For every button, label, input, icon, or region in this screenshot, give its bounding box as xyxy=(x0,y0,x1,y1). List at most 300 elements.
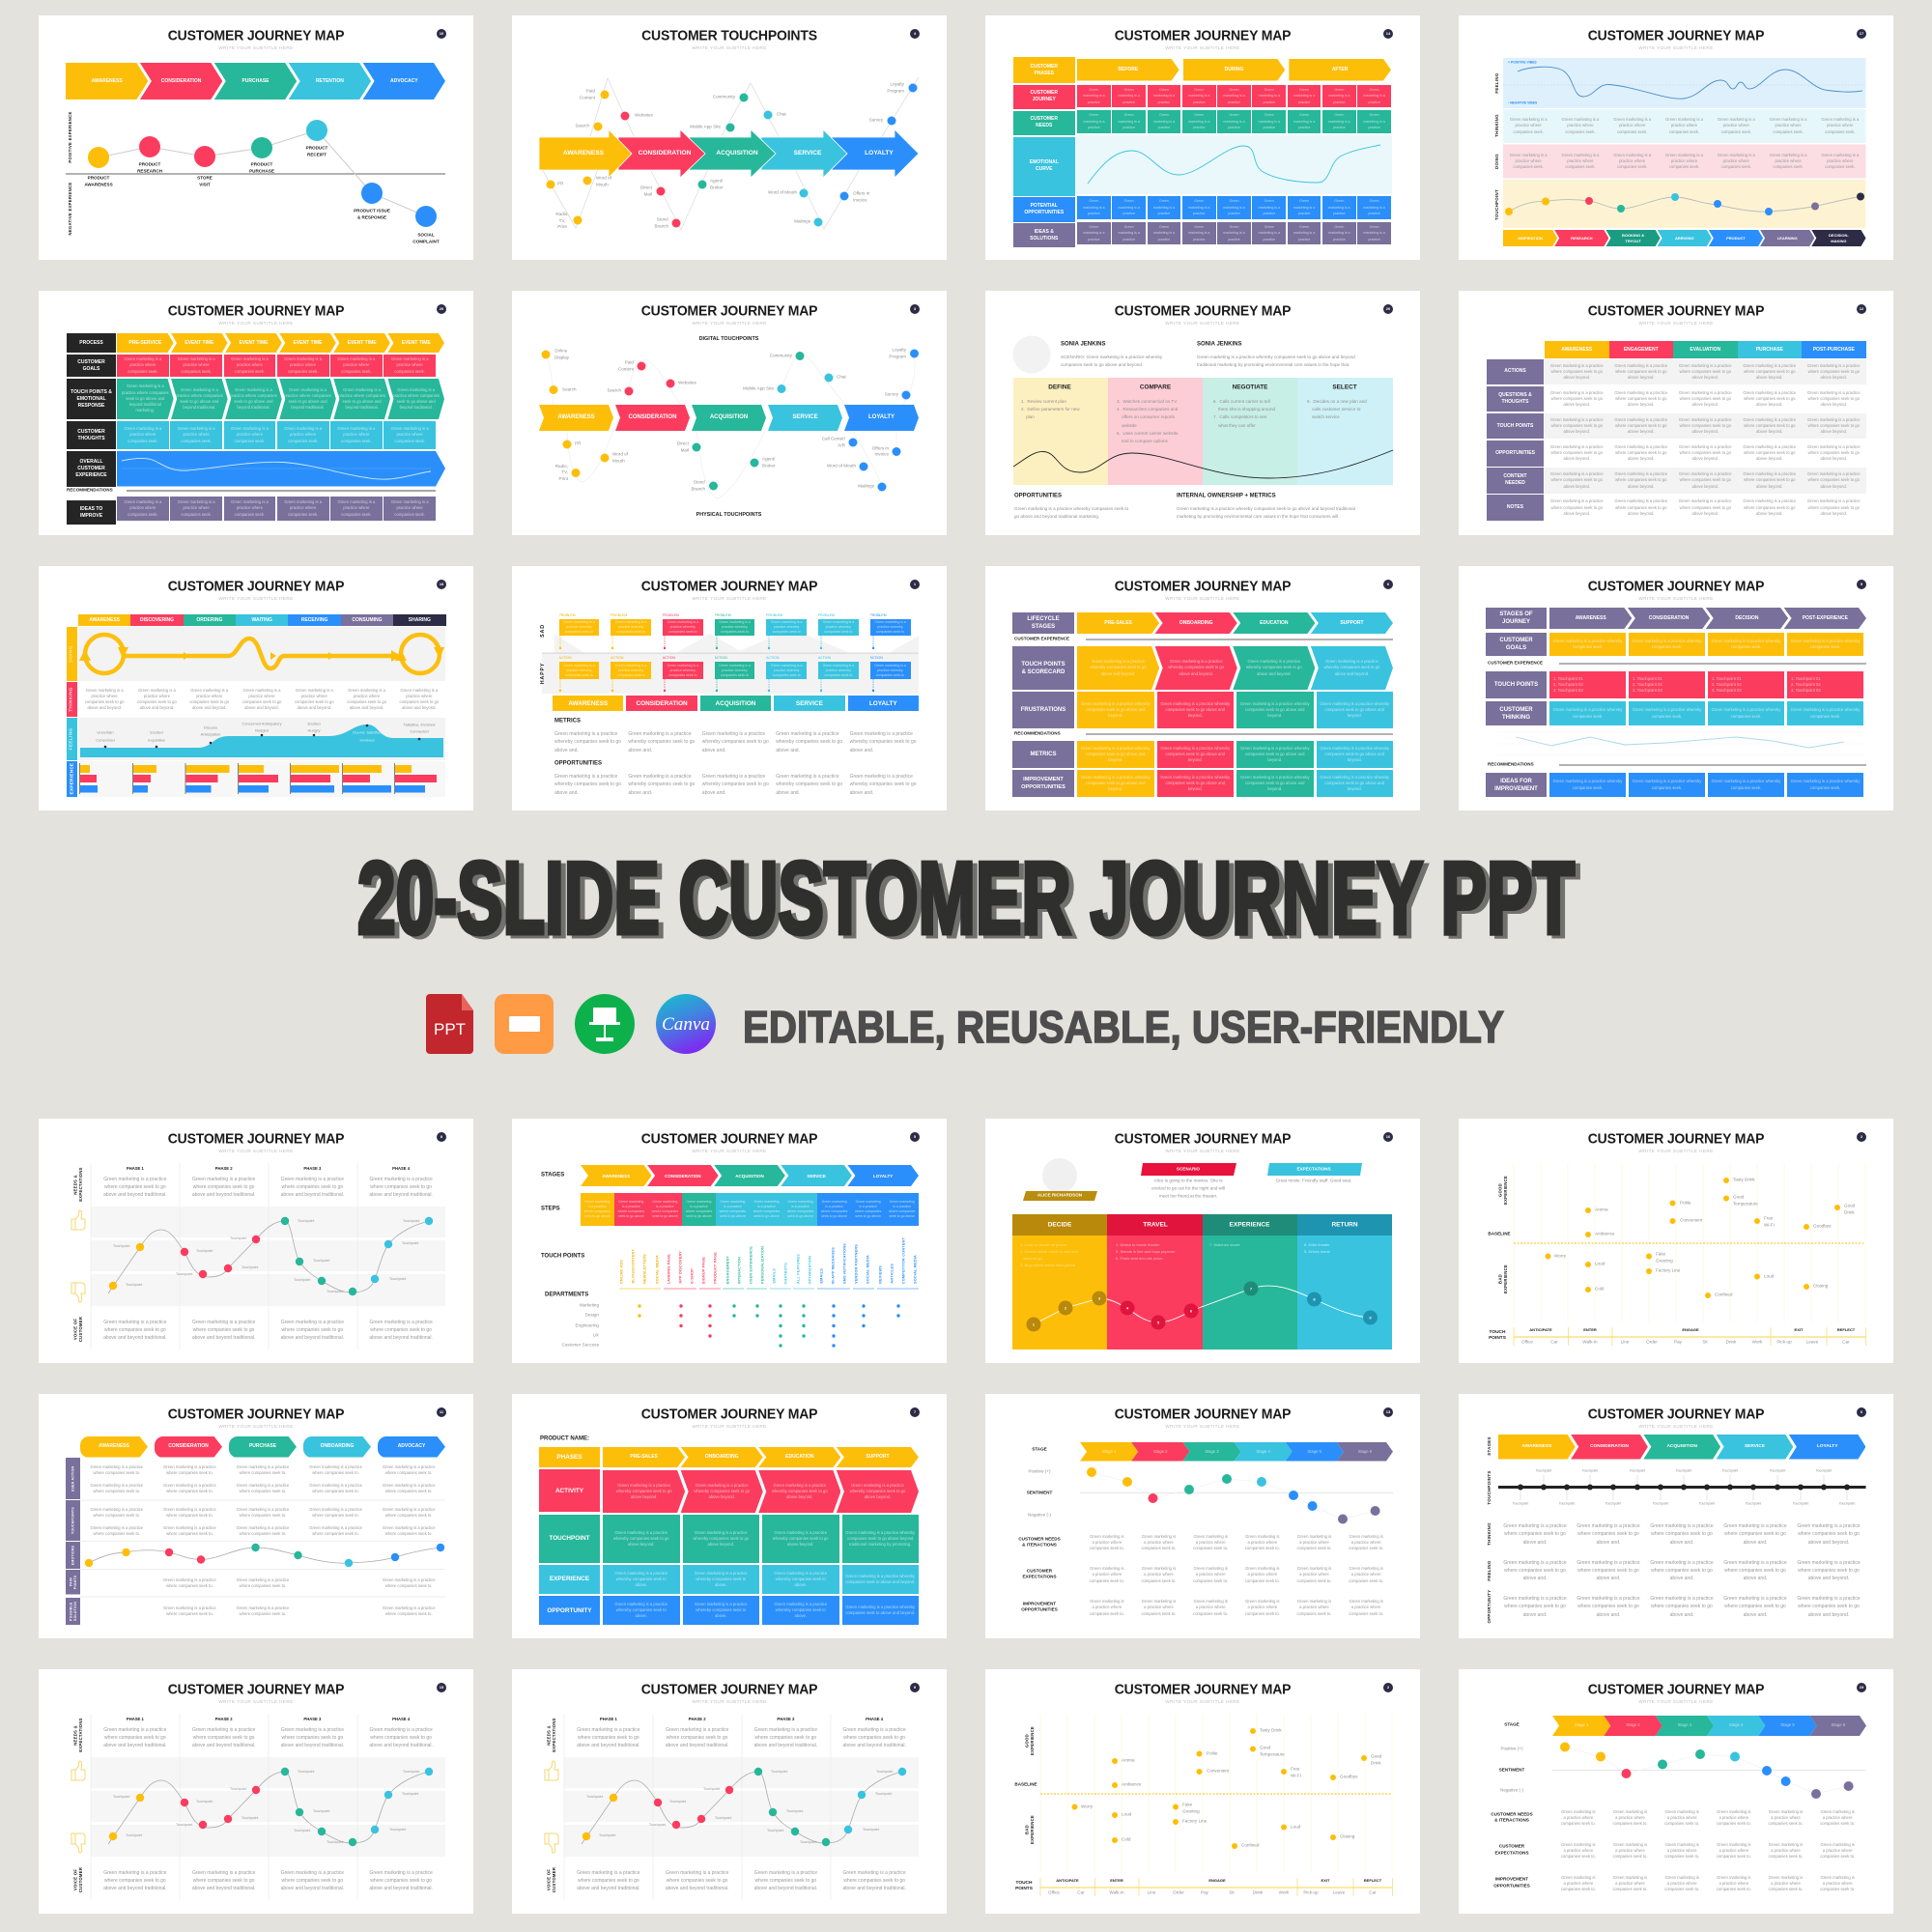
row label: EMOTIONS xyxy=(71,1546,74,1565)
stage chevrons: CONSIDERATION xyxy=(1590,1444,1629,1449)
touchpoint label: Search xyxy=(562,386,577,391)
panel: digital and physical touchpoints xyxy=(512,291,947,535)
row label xyxy=(1491,1811,1533,1824)
touchpoint dots xyxy=(541,350,919,498)
stage chevrons: TRYOUT xyxy=(1625,238,1641,243)
icon: google slides xyxy=(0,0,580,1063)
needs text: Green marketing is a practice where companies seek to. xyxy=(1090,1534,1124,1550)
table body: Green marketing is a practice where companies seek to go above beyond. xyxy=(1807,390,1861,407)
heading: CUSTOMER JOURNEY MAP xyxy=(1115,26,1291,43)
phase curve chart xyxy=(39,1119,473,1363)
stage pills: ONBOARDING xyxy=(321,1443,354,1449)
opportunity text: Green marketing is a practice where companies seek to go above and. xyxy=(1503,1596,1567,1618)
section label: CUSTOMER EXPERIENCE xyxy=(1014,637,1069,641)
stage chevrons: Stage 2 xyxy=(1153,1449,1167,1454)
customer journey cells xyxy=(1077,85,1391,107)
persona name: SONIA JENKINS xyxy=(1197,342,1241,348)
phase chevrons: ONBOARDING xyxy=(705,1454,739,1460)
thinking text: Green marketing is a practice where companies seek to go above and. xyxy=(1577,1523,1640,1546)
vertical touchpoint list: APP DISCOVERY xyxy=(678,1251,682,1284)
table body: Green marketing is a practice where companies seek to go above beyond. xyxy=(1743,390,1796,407)
touch point phases: Car xyxy=(1550,1340,1558,1345)
touchpoint labels: Touchpoint xyxy=(196,1800,213,1804)
sentiment chart xyxy=(1459,1669,1893,1914)
stage chevrons: Stage 5 xyxy=(1308,1449,1321,1454)
lower touchpoint labels: Touchpoint xyxy=(1793,1501,1808,1505)
arrow label: ACQUISITION xyxy=(716,150,758,156)
touch point phases: ENTER xyxy=(1110,1878,1123,1883)
vertical touchpoint list: COMPETITOR CONTENT xyxy=(901,1237,905,1284)
touchpoint labels: Touchpoint xyxy=(402,1241,418,1245)
improvement cells xyxy=(1077,770,1393,797)
touch point chevrons: Green marketing is a practice whereby companies seek to go above and beyond. xyxy=(1246,659,1302,676)
opportunity cells: Green marketing is a practice whereby companies seek to above and beyond. xyxy=(845,1605,915,1615)
user action text: Green marketing is a practice where companies seek to. xyxy=(237,1483,289,1493)
vertical touchpoint list: ALL FEATURES xyxy=(796,1254,800,1284)
problem labels: PROBLEM xyxy=(663,612,679,616)
decide list xyxy=(1020,1241,1078,1268)
needs text: Green marketing is a practice where companies seek to go above and beyond traditional. xyxy=(666,1727,728,1748)
feeling text: Green marketing is a practice where companies seek to go above and beyond. xyxy=(1797,1560,1861,1581)
row label xyxy=(69,1576,77,1589)
touchpoint label: Community xyxy=(770,353,792,357)
ideas cells: Green marketing is a practice where companies seek. xyxy=(178,499,215,517)
stage chevrons: AWARENESS xyxy=(557,414,595,420)
ideas cells: Green marketing is a practice xyxy=(1328,225,1350,242)
process chevrons xyxy=(117,333,444,353)
touchpoints text: Green marketing is a practice where companies seek to. xyxy=(163,1507,216,1518)
possible solution text: Green marketing is a practice where companies seek to. xyxy=(163,1605,216,1616)
needs text: Green marketing is a practice where companies seek to. xyxy=(1349,1534,1383,1550)
customer needs cells: Green marketing is a practice xyxy=(1188,113,1209,129)
negotiate list: what they can offer xyxy=(1218,423,1256,428)
vertical touchpoint list: SIGNUP PAGE xyxy=(701,1257,705,1284)
row label: CUSTOMER xyxy=(1027,1568,1052,1573)
voice text: Green marketing is a practice where companies seek to go above and beyond traditional. xyxy=(666,1870,728,1891)
user action text: Green marketing is a practice where companies seek to. xyxy=(309,1483,362,1493)
page badge xyxy=(437,1683,446,1692)
heading: CUSTOMER JOURNEY MAP xyxy=(1588,577,1764,594)
arrow label: CONSIDERATION xyxy=(639,150,691,156)
touch point phases: Car xyxy=(1369,1890,1377,1895)
table body: Green marketing is a practice where companies seek to go above beyond. xyxy=(1743,498,1796,516)
row label: TOUCHPOINT xyxy=(1494,189,1499,220)
thinking cells xyxy=(1510,117,1859,134)
needs text: Green marketing is a practice where companies seek to go above and beyond traditional. xyxy=(103,1727,167,1748)
compare list: tool to compare options xyxy=(1122,439,1168,443)
touchpoint label: Chat xyxy=(837,375,846,380)
heading: CUSTOMER JOURNEY MAP xyxy=(1115,577,1291,594)
touchpoint label: PR xyxy=(557,182,563,186)
customer thoughts cells: Green marketing is a practice where companies seek. xyxy=(337,426,375,443)
ideas cells: Green marketing is a practice whereby companies seek. xyxy=(1553,779,1622,790)
axis label positive: POSITIVE EXPERIENCE xyxy=(68,111,72,163)
page badge xyxy=(437,304,446,314)
touchpoint labels: Touchpoint xyxy=(767,1829,783,1833)
vertical touchpoint list: SOCIAL MEDIA xyxy=(655,1255,659,1284)
description text: traditional marketing by promoting environmental core values in the hope that. xyxy=(1197,362,1350,367)
feeling label: Inquisitive xyxy=(148,737,165,742)
touch point chevrons: Green marketing is a practice where companies seek to go above and beyond traditional. xyxy=(176,387,223,410)
opportunity text xyxy=(1498,1595,1865,1619)
touch points label: TOUCH xyxy=(1490,1330,1505,1335)
stage chevrons: AWARENESS xyxy=(1522,1444,1551,1449)
touch point phases: Walk-in xyxy=(1109,1890,1124,1895)
row label: STAGES xyxy=(1487,1436,1492,1456)
touchpoint label: Mailings xyxy=(794,219,810,224)
point labels: Drink xyxy=(1844,1209,1855,1214)
touchpoint label: Mobile App Site xyxy=(743,385,774,390)
stage chevrons xyxy=(1080,1442,1393,1461)
problem labels: PROBLEM xyxy=(611,612,627,616)
point labels: Closing xyxy=(1340,1834,1354,1839)
section label: RECOMMENDATIONS xyxy=(1488,762,1534,767)
doing cells: Green marketing is a practice where companies seek. xyxy=(1665,153,1703,169)
touch point phases: ENGAGE xyxy=(1208,1878,1226,1883)
compare list xyxy=(1117,398,1179,445)
customer journey cells: Green marketing is a practice xyxy=(1223,88,1245,104)
row label: STAGE xyxy=(1504,1722,1520,1727)
touchpoint label xyxy=(596,175,611,186)
row labels: ACTIONS xyxy=(1504,368,1526,374)
touchpoint labels: Touchpoint xyxy=(176,1823,192,1827)
touch point phases: Pay xyxy=(1674,1340,1682,1345)
table body: Green marketing is a practice where companies seek to go above beyond. xyxy=(1807,417,1861,434)
touchpoint arrows and dots xyxy=(539,77,920,230)
panel: stages of journey with line chart xyxy=(1459,566,1893,810)
axis label xyxy=(73,1718,83,1752)
define list xyxy=(1021,398,1080,422)
touchpoint label: Community xyxy=(713,95,735,99)
row labels: POTENTIAL xyxy=(1031,203,1058,209)
expectations text: Green marketing is a practice where companies seek to. xyxy=(1193,1566,1228,1583)
stage chevrons: CONSIDERATION xyxy=(161,77,201,83)
frustrations cells: Green marketing is a practice whereby companies seek to go above and beyond. xyxy=(1081,701,1151,718)
needs text: Green marketing is a practice where companies seek to go above and beyond traditional. xyxy=(577,1727,640,1748)
row label: POSSIBLE xyxy=(69,1602,72,1621)
vertical touchpoint list: ONLINE ADS xyxy=(619,1260,623,1284)
phase headers xyxy=(564,1717,919,1723)
sentiment line chart xyxy=(1459,566,1893,810)
needs text: Green marketing is a practice where companies seek to. xyxy=(1664,1809,1699,1826)
phase headers: PHASE 2 xyxy=(215,1717,233,1721)
point labels: Aroma xyxy=(1122,1758,1135,1763)
thinking cells: Green marketing is a practice where companies seek. xyxy=(1510,117,1548,134)
row labels: PHASES xyxy=(1034,70,1054,75)
stage chevrons: RETENTION xyxy=(316,77,344,83)
row label: CUSTOMER xyxy=(1499,638,1533,643)
needs text: Green marketing is a practice where companies seek to. xyxy=(1612,1809,1648,1826)
needs text: Green marketing is a practice where companies seek to go above and beyond traditional. xyxy=(192,1727,255,1748)
thinking text: Green marketing is a practice where companies seek to go above and beyond. xyxy=(137,688,177,710)
page badge: 9 xyxy=(914,1685,916,1690)
row labels: CUSTOMER xyxy=(77,359,105,365)
heading: CUSTOMER JOURNEY MAP xyxy=(168,1680,344,1697)
point labels: Greeting xyxy=(1182,1808,1200,1813)
stage chevrons: LOYALTY xyxy=(873,1173,893,1179)
touchpoint label: Websites xyxy=(635,113,653,118)
opportunities text: go above and beyond traditional marketing. xyxy=(1014,514,1099,519)
action cards: Green marketing is a practice whereby companies seek to xyxy=(771,663,802,676)
touchpoint labels: Touchpoint xyxy=(242,1265,258,1269)
user action text: Green marketing is a practice where companies seek to. xyxy=(383,1483,436,1493)
touchpoint label: Search xyxy=(575,124,589,128)
label: PRODUCT xyxy=(306,145,327,150)
touch point phases: Car xyxy=(1842,1340,1850,1345)
phase headers: PHASE 4 xyxy=(392,1717,410,1721)
heading: CUSTOMER JOURNEY MAP xyxy=(168,1405,344,1422)
point labels: Confined xyxy=(1241,1843,1259,1848)
stage bars: AWARENESS xyxy=(568,699,608,707)
customer journey cells: Green marketing is a practice xyxy=(1188,88,1209,104)
needs text: Green marketing is a practice where companies seek to go above and beyond traditional. xyxy=(281,1177,344,1198)
point labels: Fake xyxy=(1656,1251,1665,1256)
stage bars: LOYALTY xyxy=(869,699,897,707)
problem labels: PROBLEM xyxy=(818,612,835,616)
improvement cells: Green marketing is a practice whereby companies seek to go above and beyond. xyxy=(1160,775,1230,791)
voice text: Green marketing is a practice where companies seek to go above and beyond traditional. xyxy=(754,1870,817,1891)
row labels: CUSTOMER xyxy=(77,429,105,435)
table body: Green marketing is a practice where companies seek to go above beyond. xyxy=(1550,390,1604,407)
lower touchpoint labels xyxy=(1459,1394,1893,1638)
axis label: NEEDS & xyxy=(73,1175,77,1194)
row label: EXPECTATIONS xyxy=(1022,1575,1057,1578)
description text: Green marketing is a practice whereby companies seek to go above and beyond xyxy=(1197,355,1355,359)
label xyxy=(305,145,328,156)
underlines and department dots xyxy=(512,1119,947,1363)
scenario text: Alice is going to the movies. She is xyxy=(1154,1179,1222,1183)
action labels: ACTION xyxy=(818,656,831,660)
physical touchpoints label: PHYSICAL TOUCHPOINTS xyxy=(696,512,761,518)
experience cells: Green marketing is a practice whereby companies seek to above. xyxy=(614,1571,668,1587)
lower touchpoint labels: Touchpoint xyxy=(1653,1501,1668,1505)
lower touchpoint labels: Touchpoint xyxy=(1839,1501,1855,1505)
touchpoint labels: Touchpoint xyxy=(669,1800,686,1804)
opportunities text xyxy=(1014,505,1128,521)
axis label xyxy=(73,1317,83,1342)
panel: user action emotions rows xyxy=(39,1394,473,1638)
compare list: website xyxy=(1122,423,1137,428)
stage chevrons: Stage 6 xyxy=(1832,1722,1845,1727)
row label: LIFECYCLE STAGES xyxy=(1027,616,1060,630)
upper touchpoint labels xyxy=(1459,1394,1893,1638)
touchpoints text: Green marketing is a practice where companies seek to. xyxy=(383,1525,436,1536)
ideas cells: Green marketing is a practice xyxy=(1293,225,1315,242)
feeling label: Anticipation xyxy=(201,732,220,736)
heading: CUSTOMER JOURNEY MAP xyxy=(641,301,817,319)
touchpoint labels: Touchpoint xyxy=(230,1787,246,1791)
pain points text: Green marketing is a practice where companies seek to. xyxy=(237,1577,289,1588)
metrics heading: INTERNAL OWNERSHIP + METRICS xyxy=(1177,493,1276,498)
improvement text: Green marketing is a practice where companies seek to. xyxy=(1349,1599,1383,1616)
row label xyxy=(1021,1601,1058,1613)
vertical touchpoint list: IN-APP MESSAGES xyxy=(831,1247,835,1284)
touchpoint label: Offers in xyxy=(853,190,869,195)
touchpoint label: Invoice xyxy=(874,452,889,456)
touchpoint cells: Green marketing is a practice whereby companies seek to go above beyond. xyxy=(693,1530,749,1547)
page badge: 2 xyxy=(1861,1134,1862,1139)
heading: CUSTOMER JOURNEY MAP xyxy=(168,301,344,319)
customer journey cells: Green marketing is a practice xyxy=(1118,88,1140,104)
metrics text: Green marketing is a practice whereby companies seek to go above and. xyxy=(850,731,917,753)
column heading: DECIDE xyxy=(1048,1221,1071,1228)
axis label: VOICE OF xyxy=(73,1319,77,1340)
needs text: Green marketing is a practice where companies seek to go above and beyond traditional. xyxy=(754,1727,817,1748)
axis label: EXPERIENCE xyxy=(1503,1176,1508,1205)
touch point phases: REFLECT xyxy=(1837,1327,1855,1332)
subtitle: WRITE YOUR SUBTITLE HERE xyxy=(1638,1698,1714,1704)
stage chevrons: Stage 1 xyxy=(1575,1722,1588,1727)
upper touchpoint labels: Touchpoint xyxy=(1676,1469,1691,1473)
department label: UX xyxy=(593,1333,599,1338)
axis label: BAD xyxy=(1497,1274,1503,1284)
action labels: ACTION xyxy=(558,656,572,660)
axis label xyxy=(547,1867,556,1892)
row labels: IDEAS & xyxy=(1035,228,1054,234)
phase curve chart xyxy=(39,1669,473,1914)
touch point chevrons: Green marketing is a practice whereby companies seek to go above and beyond. xyxy=(1324,659,1379,676)
table body: Green marketing is a practice where companies seek to go above beyond. xyxy=(1614,444,1667,461)
row labels: NEEDS xyxy=(1036,123,1052,128)
stage header xyxy=(1545,341,1866,358)
customer goals cells: Green marketing is a practice where companies seek. xyxy=(284,356,322,374)
heading: CUSTOMER JOURNEY MAP xyxy=(1588,26,1764,43)
feeling label xyxy=(242,720,282,734)
touchpoint labels xyxy=(39,1669,473,1914)
axis label: GOOD xyxy=(1024,1734,1030,1747)
row labels: THOUGHTS xyxy=(77,435,105,440)
label: PRODUCT ISSUE xyxy=(354,208,390,213)
backdrop and dotted stems xyxy=(512,566,947,810)
stage header: POST-PURCHASE xyxy=(1813,346,1855,352)
touch point chevrons: Green marketing is a practice where companies seek to go above and beyond traditional. xyxy=(392,387,440,410)
stage chevrons: Stage 3 xyxy=(1678,1722,1691,1727)
stage chevrons: CONSIDERATION xyxy=(665,1173,701,1179)
opportunity cells: Green marketing is a practice whereby companies seek to above. xyxy=(614,1602,668,1618)
point labels: Confined xyxy=(1715,1293,1732,1297)
metrics text: Green marketing is a practice whereby companies seek to go above and. xyxy=(628,731,695,753)
process chevrons: EVENT TIME xyxy=(239,340,268,346)
needs text xyxy=(1552,1808,1863,1828)
touch points label xyxy=(1015,1881,1033,1893)
vertical touchpoint list: EMAILS xyxy=(819,1268,823,1284)
column heading: EXPERIENCE xyxy=(1230,1221,1269,1228)
needs text: Green marketing is a practice where companies seek to. xyxy=(1820,1809,1855,1826)
touchpoint label: Word of xyxy=(612,451,628,456)
persona shapes and stage columns: 7 xyxy=(1250,1287,1253,1291)
row labels: NEEDED xyxy=(1505,480,1525,486)
baseline label: BASELINE xyxy=(1488,1232,1511,1236)
phase chevrons xyxy=(603,1447,919,1467)
phase headers: PHASE 4 xyxy=(866,1717,883,1721)
point labels: Aroma xyxy=(1595,1208,1608,1212)
experience dots chart xyxy=(985,1669,1420,1914)
phase chevrons: EDUCATION xyxy=(785,1454,813,1460)
arrow label: LOYALTY xyxy=(865,150,894,156)
metrics text: Green marketing is a practice whereby companies seek to go above and. xyxy=(554,731,621,753)
panel: feeling thinking doing touchpoint bands xyxy=(1459,15,1893,260)
stage bars: CONSIDERATION xyxy=(637,699,688,707)
stage chevrons: CONSIDERATION xyxy=(1649,614,1689,620)
heading: CUSTOMER JOURNEY MAP xyxy=(1115,1680,1291,1697)
frustrations cells: Green marketing is a practice whereby companies seek to go above and beyond. xyxy=(1160,701,1230,718)
icon: powerpoint file: PPT xyxy=(434,1020,466,1038)
axis label xyxy=(1024,1726,1036,1755)
label: PRODUCT xyxy=(139,161,160,166)
touchpoint labels: Touchpoint xyxy=(599,1833,615,1837)
row label: IDEAS FOR IMPROVEMENT xyxy=(1494,779,1538,792)
touch point chevrons: Green marketing is a practice where companies seek to go above and beyond traditional. xyxy=(284,387,331,410)
section label: CUSTOMER EXPERIENCE xyxy=(1488,661,1543,666)
touchpoint label xyxy=(555,464,568,481)
customer thoughts cells: Green marketing is a practice where companies seek. xyxy=(231,426,269,443)
thinking text: Green marketing is a practice where companies seek to go above and beyond. xyxy=(295,688,334,710)
problem cards: Green marketing is a practice whereby companies seek to xyxy=(668,620,698,634)
touchpoint label: Paid xyxy=(586,88,595,93)
stage chevrons: Stage 4 xyxy=(1729,1722,1743,1727)
column heading: COMPARE xyxy=(1140,384,1171,390)
axis label: GOOD xyxy=(1497,1183,1503,1197)
axis label negative: NEGATIVE EXPERIENCE xyxy=(68,183,72,235)
stage chevrons xyxy=(1552,1716,1866,1736)
stage chevrons: Stage 5 xyxy=(1780,1722,1795,1727)
customer needs cells: Green marketing is a practice xyxy=(1328,113,1350,129)
opportunities cells: Green marketing is a practice xyxy=(1293,199,1315,215)
label: PRODUCT xyxy=(88,175,109,180)
panel: good and bad experience baseline xyxy=(1459,1119,1893,1363)
customer needs cells xyxy=(1077,110,1391,133)
touchpoint labels: Touchpoint xyxy=(876,1770,893,1774)
touchpoint label: Mail xyxy=(681,447,689,452)
upper touchpoint labels: Touchpoint xyxy=(1630,1469,1645,1473)
page badge xyxy=(437,1407,446,1417)
recommendations label: RECOMMENDATIONS xyxy=(67,488,113,493)
ideas cells: Green marketing is a practice xyxy=(1363,225,1385,242)
return list xyxy=(1304,1241,1330,1255)
row labels: EMOTIONAL xyxy=(1030,159,1059,165)
row label: SENTIMENT xyxy=(1027,1490,1052,1494)
row label: IMPROVEMENT OPPORTUNITIES xyxy=(1021,777,1065,790)
upper touchpoint labels: Touchpoint xyxy=(1536,1469,1551,1473)
customer journey cells: Green marketing is a practice xyxy=(1083,88,1105,104)
persona shapes and stage columns: 8 xyxy=(1313,1296,1316,1302)
ideas cells: Green marketing is a practice xyxy=(1259,225,1280,242)
persona shapes and stage columns: 4 xyxy=(1126,1306,1129,1310)
axis label: EXPERIENCE xyxy=(1503,1264,1508,1293)
user action text: Green marketing is a practice where companies seek to. xyxy=(163,1483,216,1493)
touchpoint labels: Touchpoint xyxy=(649,1823,666,1827)
table body: Green marketing is a practice where companies seek to go above beyond. xyxy=(1614,498,1667,516)
row label xyxy=(1022,1568,1057,1580)
row label: DOING xyxy=(1494,154,1499,169)
touchpoint labels: Touchpoint xyxy=(786,1809,803,1813)
table body: Green marketing is a practice where companies seek to go above beyond. xyxy=(1614,417,1667,434)
label xyxy=(354,208,390,219)
heading: CUSTOMER JOURNEY MAP xyxy=(1115,1405,1291,1422)
needs text: Green marketing is a practice where companies seek to. xyxy=(1561,1809,1596,1826)
ideas cells xyxy=(1077,222,1391,244)
customer thoughts cells: Green marketing is a practice where companies seek. xyxy=(124,426,161,443)
opportunities cells: Green marketing is a practice xyxy=(1223,199,1245,215)
touchpoint label xyxy=(691,479,705,491)
row label: USER ACTION xyxy=(71,1465,74,1492)
goal cells: Green marketing is a practice whereby companies seek. xyxy=(1553,639,1622,649)
point labels: Closing xyxy=(1813,1284,1828,1289)
phase headers: PHASE 1 xyxy=(127,1166,144,1171)
opportunities cells: Green marketing is a practice xyxy=(1153,199,1175,215)
touchpoint label: PR xyxy=(575,441,581,446)
touchpoints text: Green marketing is a practice where companies seek to. xyxy=(309,1525,362,1536)
